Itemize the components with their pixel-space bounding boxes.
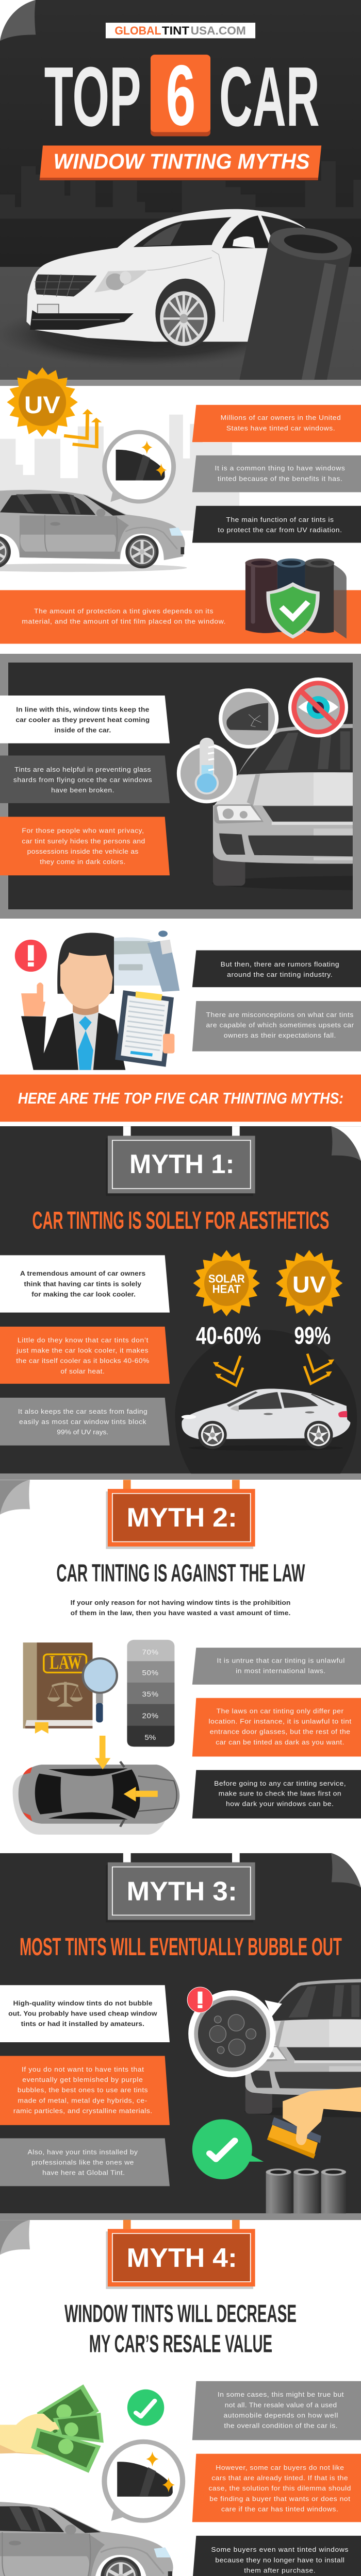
- logo: [106, 23, 255, 38]
- panel: myth 1 content bottom: [0, 1250, 357, 1617]
- text block: laws differ: [192, 1698, 361, 1757]
- icon: cracked window: [219, 688, 278, 749]
- panel: hero background: [0, 0, 361, 386]
- text block: seats fading: easily as most car window tints block: [19, 1418, 146, 1426]
- subtitle banner: WINDOW TINTING MYTHS: [54, 149, 309, 174]
- text block: untrue: It is untrue that car tinting is unlawful: [217, 1657, 344, 1664]
- city skyline: [0, 161, 361, 218]
- panel: misconceptions and myth 1 top: [0, 982, 361, 1122]
- logo: TINT: [162, 24, 190, 37]
- text block: resale value: In some cases, this might be true but: [218, 2391, 344, 2398]
- page peel corner: [331, 1853, 361, 1888]
- illustration: hand with money: [0, 2384, 104, 2473]
- panel: myth 3 content: [0, 1979, 361, 2289]
- text block: glass shards: [0, 755, 170, 803]
- text block: keep car cooler: In line with this, window tints keep the: [16, 706, 149, 713]
- sign: myth 3: [106, 1853, 255, 1922]
- text block: professionals: Also, have your tints installed by: [28, 2148, 138, 2156]
- top view car: [13, 1761, 179, 1835]
- text block: misconceptions: [192, 1001, 361, 1052]
- film roll: [239, 223, 354, 380]
- film rolls: [266, 2168, 346, 2213]
- panel: benefits content: [0, 677, 361, 1010]
- text block: professionals: have here at Global Tint.: [42, 2169, 125, 2176]
- illustration: businessman head: [57, 933, 114, 1010]
- side view tinted car: [0, 2501, 173, 2576]
- text block: privacy: they come in dark colors.: [40, 858, 125, 866]
- text block: solar heat: the car itself cooler as it blocks 40-60%: [16, 1357, 150, 1365]
- text block: high quality: High-quality window tints do not bubble: [13, 1999, 153, 2007]
- text block: main function: to protect the car from UV radiation.: [218, 527, 342, 534]
- text block: untrue: [192, 1648, 361, 1685]
- stat: 40-60%: 40-60%: [196, 1322, 261, 1349]
- text block: want tinted: [192, 2536, 361, 2576]
- callout: tinted window: [105, 432, 174, 502]
- heading band: top five myths: [0, 1075, 361, 1122]
- hero car: [26, 209, 308, 348]
- text block: misconceptions: owners as their expectations fall.: [224, 1032, 336, 1039]
- text block: privacy: car tint surely hides the persons and: [22, 837, 145, 845]
- chart: tint percentage scale: 5%: [144, 1734, 156, 1742]
- icon: magnifier: [83, 1658, 117, 1722]
- text block: purple bubbles: [0, 2056, 170, 2125]
- page peel corner: [331, 1126, 361, 1161]
- chart: tint percentage scale: 50%: [142, 1669, 158, 1677]
- alert icon: [187, 1987, 213, 2012]
- panel: myth 3: [0, 1853, 361, 2220]
- text block: glass shards: shards from flying once the car windows: [13, 776, 152, 784]
- icon: green check: [127, 2389, 164, 2426]
- text block: check laws: how dark your windows can be.: [226, 1800, 334, 1807]
- film rolls: [245, 558, 347, 638]
- icon: UV sun: [7, 367, 78, 437]
- text block: professionals: [0, 2138, 170, 2186]
- panel: myth 1: [0, 1126, 361, 1480]
- text block: check laws: Before going to any car tinting service,: [214, 1780, 346, 1787]
- text block: purple bubbles: If you do not want to have tints that: [22, 2066, 144, 2073]
- text block: tremendous amount: A tremendous amount of car owners: [20, 1270, 145, 1277]
- text block: solar heat: [0, 1327, 170, 1384]
- panel: intro benefits: [0, 367, 361, 644]
- text block: common thing: It is a common thing to have windows: [215, 465, 345, 472]
- text block: seats fading: It also keeps the car seats from fading: [18, 1408, 147, 1415]
- text block: high quality: tints or had it installed by amateurs.: [21, 2020, 144, 2027]
- title: 6: [166, 48, 195, 144]
- heading: myth 4: [64, 2299, 297, 2358]
- illustration: mechanic and car behind man: [110, 930, 179, 992]
- text block: rumors: [192, 951, 361, 987]
- text block: prohibition: [71, 1599, 290, 1617]
- city skyline light: [0, 415, 239, 531]
- icon: solar heat sun: HEAT: [212, 1283, 241, 1296]
- text block: keep car cooler: car cooler as they prevent heat coming: [15, 716, 150, 723]
- icon: clipboard: [115, 990, 174, 1067]
- icon: solar heat sun: [193, 1250, 260, 1316]
- icon: privacy eye: [288, 677, 348, 738]
- text block: glass shards: Tints are also helpful in preventing glass: [14, 766, 151, 773]
- logo: USA.COM: [191, 24, 246, 37]
- text block: laws differ: car can be tinted as dark as you want.: [216, 1738, 344, 1746]
- panel: hero content: [0, 0, 361, 380]
- icon: UV sun: UV: [292, 1272, 326, 1297]
- side view tinted car: [0, 490, 185, 568]
- spotlight circle: [175, 1330, 357, 1473]
- text block: car buyers: case, the solution for this dilemma should: [208, 2485, 351, 2492]
- front view car: [244, 1979, 361, 2117]
- text block: purple bubbles: bubbles, the best ones to use are tints: [18, 2087, 148, 2094]
- text block: privacy: [0, 817, 170, 875]
- text block: professionals: professionals like the ones we: [31, 2159, 134, 2166]
- text block: purple bubbles: eventually get blemished by purple: [22, 2076, 143, 2083]
- hand with squeegee: [267, 2087, 361, 2159]
- arrows: window locations: [95, 1736, 158, 1802]
- text block: millions of owners: States have tinted car windows.: [226, 425, 335, 432]
- panel: myth 3 header: [20, 1853, 361, 1960]
- text band: protection amount: [0, 590, 361, 644]
- text block: resale value: not all. The resale value of a used: [225, 2401, 337, 2409]
- arrows: blocked heat: [213, 1354, 334, 1386]
- sign: myth 2: MYTH 2:: [127, 1502, 237, 1532]
- page peel corner: [0, 0, 36, 41]
- text block: millions of owners: [192, 405, 361, 442]
- text block: laws differ: entrance door glasses, but the rest of the: [210, 1728, 350, 1736]
- text band: protection amount: material, and the amount of tint film placed on the window.: [22, 618, 226, 625]
- text block: resale value: [192, 2381, 361, 2440]
- page peel corner: [0, 2220, 30, 2255]
- text block: want tinted: because they no longer have to install: [215, 2556, 344, 2564]
- title: TOP: [44, 49, 141, 144]
- text block: want tinted: them after purchase.: [244, 2567, 316, 2574]
- icon: law book: [23, 1642, 92, 1734]
- sign: myth 1: MYTH 1:: [129, 1149, 234, 1179]
- text block: purple bubbles: ramic particles, and crystalline materials.: [13, 2107, 152, 2114]
- illustration: businessman body: [21, 982, 125, 1070]
- text block: resale value: the overall condition of the car is.: [224, 2422, 337, 2429]
- icon: UV sun: [276, 1250, 342, 1316]
- text block: prohibition: of them in the law, then you have wasted a vast amount of time.: [71, 1609, 290, 1617]
- sign: myth 4: [106, 2220, 255, 2289]
- text block: tremendous amount: think that having car tints is solely: [24, 1280, 142, 1287]
- sign: myth 3: MYTH 3:: [127, 1876, 237, 1906]
- text block: resale value: automobile depends on how well: [223, 2412, 338, 2419]
- sign: myth 1: [106, 1126, 255, 1196]
- front view car: [212, 724, 361, 890]
- text block: prohibition: If your only reason for not having window tints is the prohibition: [71, 1599, 290, 1606]
- text block: purple bubbles: made of metal, metal dye hybrids, ce-: [18, 2097, 147, 2104]
- callout: tinted window: [104, 2442, 183, 2521]
- text block: rumors: But then, there are rumors floating: [221, 961, 339, 968]
- text block: misconceptions: There are misconceptions on what car tints: [206, 1011, 354, 1019]
- text block: check laws: make sure to check the laws first on: [219, 1790, 341, 1797]
- text block: car buyers: cars that are already tinted. If that is the: [211, 2475, 348, 2482]
- chart: tint percentage scale: 20%: [142, 1712, 158, 1720]
- icon: law book: LAW: [50, 1652, 81, 1673]
- text block: solar heat: Little do they know that car tints don’t: [18, 1336, 149, 1344]
- text block: high quality: out. You probably have used cheap window: [8, 2010, 157, 2017]
- text block: want tinted: Some buyers even want tinted windows: [211, 2546, 349, 2553]
- chart: tint percentage scale: 35%: [142, 1691, 158, 1699]
- page peel corner: [0, 1480, 30, 1515]
- text block: glass shards: have been broken.: [51, 787, 114, 794]
- text block: tremendous amount: [0, 1255, 170, 1313]
- text band: protection amount: The amount of protection a tint gives depends on its: [34, 607, 214, 615]
- text block: keep car cooler: [0, 696, 170, 743]
- text block: tremendous amount: for making the car look cooler.: [31, 1291, 136, 1298]
- text block: car buyers: [192, 2454, 361, 2522]
- text block: millions of owners: Millions of car owners in the United: [221, 414, 341, 421]
- text block: check laws: [192, 1770, 361, 1819]
- logo: GLOBAL: [114, 24, 161, 37]
- text block: untrue: in most international laws.: [236, 1667, 325, 1674]
- text block: seats fading: 99% of UV rays.: [57, 1429, 108, 1436]
- text block: privacy: possessions inside the vehicle as: [27, 848, 139, 855]
- text block: common thing: [192, 455, 361, 492]
- text block: solar heat: of solar heat.: [60, 1367, 105, 1375]
- road shadow: [0, 303, 290, 366]
- subtitle banner: [40, 145, 321, 180]
- text block: car buyers: However, some car buyers do not like: [216, 2464, 344, 2471]
- chart: tint percentage scale: [127, 1640, 174, 1747]
- sign: myth 4: MYTH 4:: [127, 2243, 237, 2273]
- icon: green check bubble: [192, 2119, 264, 2179]
- text block: rumors: around the car tinting industry.: [227, 971, 333, 978]
- text block: solar heat: just make the car look cooler, it makes: [16, 1347, 149, 1354]
- text block: privacy: For those people who want privacy,: [22, 827, 144, 835]
- icon: solar heat sun: SOLAR: [208, 1273, 245, 1285]
- panel: benefits frame: [0, 654, 361, 919]
- panel: myth 4 content: [0, 2299, 361, 2576]
- text block: car buyers: care if the car has tinted windows.: [221, 2505, 338, 2513]
- icon: UV sun: UV: [24, 391, 60, 418]
- stat: 99%: 99%: [294, 1322, 331, 1349]
- text block: seats fading: [0, 1398, 170, 1446]
- sign: myth 2: [106, 1480, 255, 1549]
- icon: shield check: [266, 582, 320, 638]
- text block: main function: [192, 506, 361, 543]
- chart: tint percentage scale: 70%: [142, 1649, 158, 1656]
- alert icon: [14, 939, 47, 972]
- text block: car buyers: be finding a buyer that wants or does not: [209, 2495, 350, 2502]
- text block: keep car cooler: inside of the car.: [54, 726, 111, 734]
- text block: laws differ: location. For instance, it is unlawful to tint: [208, 1718, 352, 1725]
- text block: main function: The main function of car tints is: [226, 516, 334, 523]
- text block: common thing: tinted because of the benefits it has.: [218, 475, 342, 482]
- white sedan: [182, 1388, 350, 1451]
- car shadow: [0, 564, 187, 572]
- text block: laws differ: The laws on car tinting only differ per: [217, 1707, 344, 1715]
- text block: misconceptions: are capable of which sometimes upsets car: [206, 1022, 354, 1029]
- icon: thermometer: [177, 738, 237, 803]
- callout: tint bubbles: [188, 1990, 282, 2077]
- panel: myth 1 content top: [0, 1126, 361, 1313]
- panel: myth 2 content: [13, 1640, 361, 1835]
- title: [44, 48, 320, 144]
- text block: high quality: [0, 1985, 170, 2042]
- arrows: reflected rays: [64, 409, 102, 447]
